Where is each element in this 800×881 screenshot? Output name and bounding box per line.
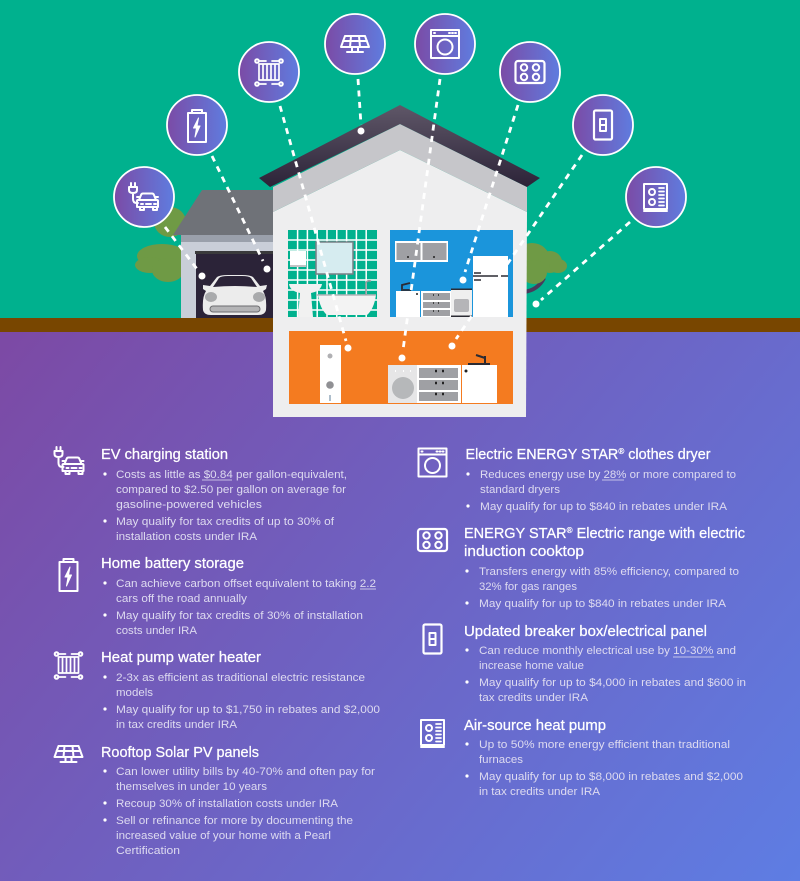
- icon circle: heat pump: [626, 167, 686, 227]
- heading: clothes dryer: clothes dryer: [624, 447, 711, 463]
- bullet list: breaker: Can reduce monthly electrical use by 10-30% and: [479, 645, 736, 657]
- sink counter: [396, 291, 420, 317]
- heading: clothes dryer: ®: [618, 447, 624, 456]
- icon circle: water heater: [239, 42, 299, 102]
- bullet list: breaker: [465, 645, 746, 704]
- heading: heat pump: Air-source heat pump: [464, 718, 606, 734]
- sink: [289, 284, 322, 317]
- heading: clothes dryer: Electric ENERGY STAR: [466, 447, 618, 463]
- bullet list: range: [465, 566, 739, 610]
- refrigerator: [473, 256, 508, 317]
- icon: heat pump: [421, 720, 444, 747]
- bullet list: heat pump: furnaces: [479, 754, 523, 766]
- bullet list: EV charging: Costs as little as $0.84 per gallon-equivalent,: [116, 469, 347, 481]
- icon: clothes dryer: [418, 448, 446, 476]
- bushes left of garage: [135, 207, 187, 282]
- bullet list: battery: May qualify for tax credits of 30% of installation: [116, 610, 363, 622]
- heading: electric range: Electric range with electric: [573, 526, 745, 542]
- heading: Rooftop Solar PV panels: Rooftop Solar PV panels: [101, 745, 259, 761]
- dashed connector lines: [165, 79, 630, 350]
- bullet list: water heater: models: [116, 687, 153, 699]
- bullet list: water heater: in tax credits under IRA: [116, 719, 237, 731]
- heading: electric range: ENERGY STAR: [464, 526, 566, 542]
- washer: [388, 365, 417, 403]
- bullet list: breaker: May qualify for up to $4,000 in rebates and $600 in: [479, 677, 746, 689]
- bullet list: battery: [103, 578, 376, 637]
- bullet list: EV charging: compared to $2.50 per gallon on average for: [116, 484, 346, 496]
- garage: [173, 190, 274, 318]
- bullet list: solar: Can lower utility bills by 40-70% and often pay for: [116, 766, 375, 778]
- icon: EV charger: [54, 447, 84, 474]
- bullet list: battery: cars off the road annually: [116, 593, 247, 605]
- bullet list: water heater: May qualify for up to $1,750 in rebates and $2,000: [116, 704, 380, 716]
- heading: electric range: ®: [567, 526, 573, 535]
- stove: [451, 290, 472, 317]
- tree right of house: [514, 243, 567, 292]
- icon circle: solar panel: [325, 14, 385, 74]
- bullet list: dryer: Reduces energy use by 28% or more compared to: [480, 469, 736, 481]
- heading: Home battery storage: Home battery storage: [101, 556, 244, 572]
- icon: water heater: [55, 652, 82, 679]
- bullet list: EV charging: May qualify for tax credits of up to 30% of: [116, 516, 335, 528]
- panel: ENERGY STAR electric range: [418, 526, 745, 610]
- kitchen: [390, 230, 513, 317]
- panel: Rooftop Solar PV panels: [54, 745, 375, 857]
- drawers: [421, 291, 451, 317]
- basement cabinet and faucet: [462, 355, 497, 403]
- bullet list: EV charging: gasoline-powered vehicles: [116, 499, 262, 511]
- bullet list: heat pump: May qualify for up to $8,000 in rebates and $2,000: [479, 771, 743, 783]
- car: [203, 275, 267, 315]
- bathroom: [288, 230, 377, 317]
- icon: solar panel: [54, 746, 82, 762]
- bullet list: EV charging: installation costs under IRA: [116, 531, 257, 543]
- bullet list: solar: Sell or refinance for more by documenting the: [116, 815, 353, 827]
- bullet list: heat pump: Up to 50% more energy efficient than traditional: [479, 739, 730, 751]
- garage roof: [173, 190, 274, 235]
- bullet list: solar: Recoup 30% of installation costs under IRA: [116, 798, 338, 810]
- bullet list: solar: [103, 766, 375, 857]
- icon circle: battery: [167, 95, 227, 155]
- panel: EV charging station: [54, 447, 347, 543]
- panel: Heat pump water heater: [55, 650, 380, 731]
- panel: Electric ENERGY STAR clothes dryer: [418, 447, 736, 513]
- icon circle: breaker panel: [573, 95, 633, 155]
- bullet list: battery: costs under IRA: [116, 625, 197, 637]
- basement drawers: [417, 365, 461, 403]
- bullet list: range: May qualify for up to $840 in rebates under IRA: [479, 598, 726, 610]
- upper cabinets: [395, 241, 448, 262]
- house wall: [273, 150, 527, 417]
- heading: breaker box: Updated breaker box/electrical panel: [464, 624, 707, 640]
- ground strip: [0, 318, 800, 332]
- heading: electric range: induction cooktop: [464, 544, 584, 560]
- bullet list: dryer: [466, 469, 736, 513]
- panel: Home battery storage: [60, 556, 376, 637]
- bullet list: dryer: May qualify for up to $840 in rebates under IRA: [480, 501, 727, 513]
- house: [259, 105, 540, 417]
- basement: [289, 331, 513, 404]
- bullet list: heat pump: [465, 739, 743, 798]
- water heater: [320, 345, 341, 403]
- bullet list: EV charging: [103, 469, 347, 543]
- bullet list: solar: themselves in under 10 years: [116, 781, 267, 793]
- bullet list: dryer: standard dryers: [480, 484, 560, 496]
- icon circle: clothes dryer: [415, 14, 475, 74]
- roof: [259, 105, 540, 187]
- panel: Air-source heat pump: [421, 718, 743, 798]
- bullet list: range: Transfers energy with 85% efficiency, compared to: [479, 566, 739, 578]
- icon: breaker panel: [424, 624, 442, 654]
- icon circle: EV charger: [114, 167, 174, 227]
- bullet list: range: 32% for gas ranges: [479, 581, 577, 593]
- bullet list: breaker: increase home value: [479, 660, 584, 672]
- heading: electric range: [464, 526, 745, 560]
- background: purple gradient lower section: [0, 332, 800, 881]
- roof underside: [273, 124, 527, 212]
- bullet list: breaker: tax credits under IRA: [479, 692, 588, 704]
- bullet list: battery: Can achieve carbon offset equivalent to taking 2.2: [116, 578, 376, 590]
- bullet list: water heater: 2-3x as efficient as traditional electric resistance: [116, 672, 365, 684]
- icon circle: induction range: [500, 42, 560, 102]
- heading: Heat pump water heater: Heat pump water heater: [101, 650, 261, 666]
- bullet list: water heater: [103, 672, 380, 731]
- mirror: [316, 242, 353, 274]
- bullet list: solar: Certification: [116, 845, 180, 857]
- icon: battery: [60, 559, 78, 591]
- background: green sky: [0, 0, 800, 318]
- bathtub: [318, 295, 376, 315]
- icon: induction range: [418, 529, 447, 551]
- bullet list: solar: increased value of your home with a Pearl: [116, 830, 331, 842]
- connector end dots: [198, 128, 540, 362]
- bullet list: heat pump: in tax credits under IRA: [479, 786, 600, 798]
- heading: EV charging station: EV charging station: [101, 447, 228, 463]
- towel: [290, 251, 306, 267]
- panel: Updated breaker box: [424, 624, 746, 704]
